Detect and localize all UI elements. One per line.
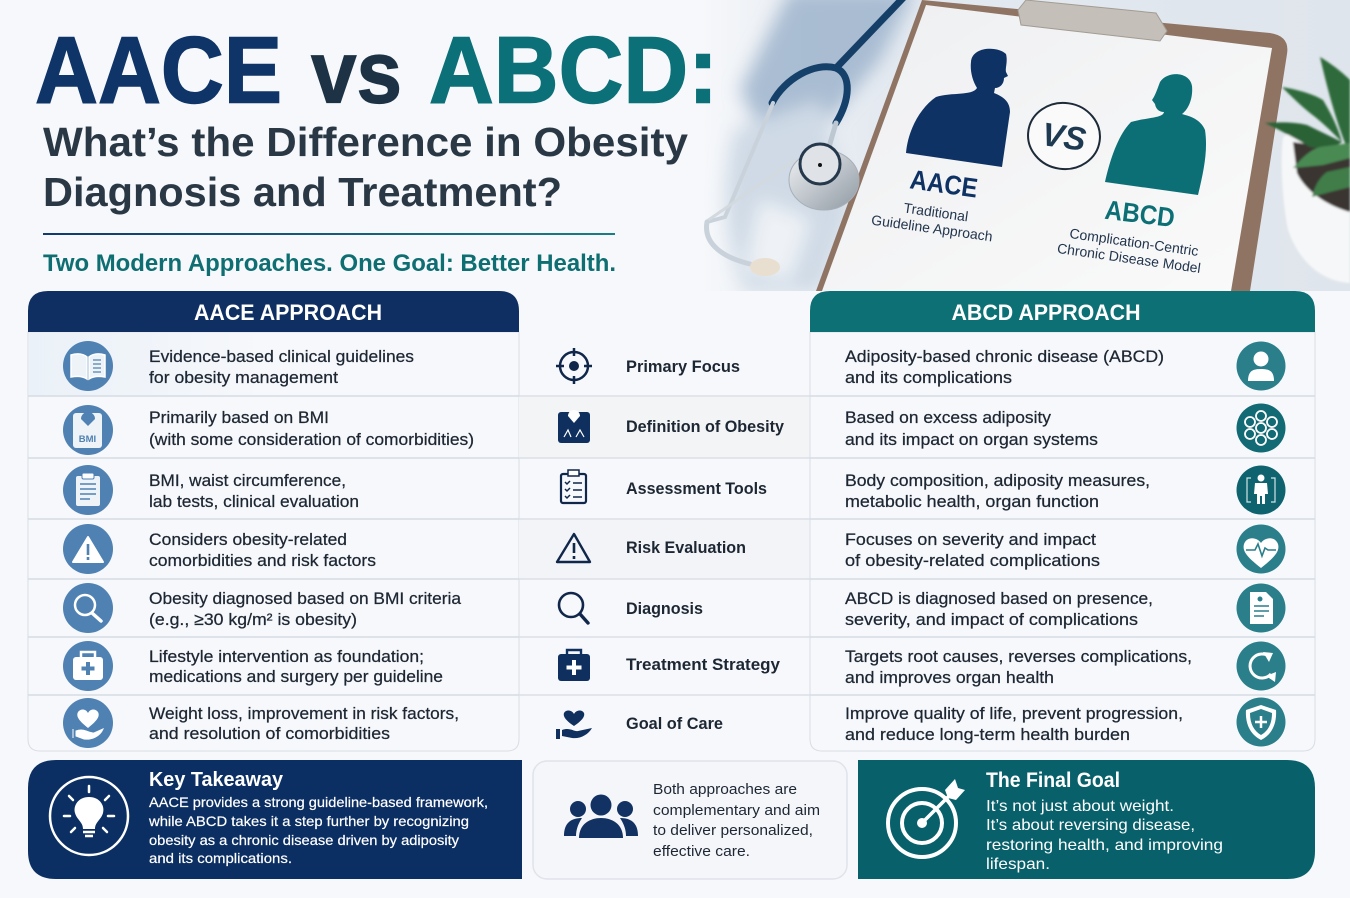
callout: key takeaway: obesity as a chronic disease driven by adiposity — [149, 832, 459, 848]
potted plant — [1265, 57, 1350, 283]
row 7: shield icon and text: Improve quality of life, prevent progression, — [845, 704, 1183, 723]
row 2: cell cluster icon and text: Based on excess adiposity — [845, 408, 1052, 427]
row 5: magnifier icon and text — [63, 583, 462, 633]
subtitle — [43, 119, 688, 215]
stethoscope — [707, 0, 903, 276]
Treatment Strategy: Treatment Strategy — [626, 656, 781, 674]
Assessment Tools: Assessment Tools — [626, 480, 767, 498]
title: AACE — [35, 18, 282, 124]
callout: key takeaway: while ABCD takes it a step further by recognizing — [148, 813, 469, 829]
Risk Evaluation — [557, 534, 746, 562]
hero photo: clipboard, stethoscope and plant — [700, 0, 1350, 291]
Goal of Care — [556, 710, 723, 739]
row 1: person icon and text — [845, 342, 1286, 390]
row 3: clipboard icon and text: lab tests, clinical evaluation — [149, 492, 359, 511]
callout: key takeaway: Key Takeaway — [149, 769, 284, 791]
row 5: magnifier icon and text: (e.g., ≥30 kg/m² is obesity) — [149, 610, 357, 629]
row 5: document icon and text — [845, 584, 1286, 632]
row 1: person icon and text: and its complications — [845, 368, 1012, 387]
row 2: BMI scale icon and text — [63, 405, 474, 455]
row 6: first aid icon and text: Lifestyle intervention as foundation; — [149, 647, 424, 666]
row 3: body scan icon and text — [845, 466, 1286, 514]
row 1: person icon and text: Adiposity-based chronic disease (ABCD) — [845, 347, 1164, 366]
ABCD silhouette — [1105, 74, 1206, 195]
callout: complementary approaches: complementary and aim — [653, 802, 820, 819]
callout: the final goal: It’s about reversing disease, — [986, 817, 1195, 834]
row 6: renewal arrows icon and text: and improves organ health — [845, 668, 1054, 687]
row 6: first aid icon and text — [63, 641, 443, 691]
hero photo: clipboard, stethoscope and plant: Guideline Approach — [870, 212, 994, 244]
row 2: BMI scale icon and text: (with some consideration of comorbidities) — [149, 430, 474, 449]
hero photo: clipboard, stethoscope and plant: Complication-Centric — [1069, 225, 1199, 259]
callout: the final goal: It’s not just about weight. — [986, 798, 1174, 815]
title: ABCD: — [429, 18, 718, 124]
row 5: document icon and text: ABCD is diagnosed based on presence, — [845, 589, 1153, 608]
row 1: book icon and text: for obesity management — [149, 368, 338, 387]
panel: comparison criteria — [519, 348, 810, 739]
row 7: heart in hand icon and text: and resolution of comorbidities — [149, 724, 390, 743]
hero photo: clipboard, stethoscope and plant: ABCD — [1103, 195, 1176, 233]
Diagnosis — [559, 593, 703, 623]
callout: complementary approaches: to deliver personalized, — [653, 822, 813, 839]
row 3: clipboard icon and text — [63, 465, 359, 515]
row 5: document icon and text: severity, and impact of complications — [845, 610, 1138, 629]
hero photo: clipboard, stethoscope and plant: Traditional — [903, 200, 969, 224]
callout: key takeaway: and its complications. — [149, 850, 292, 866]
row 4: warning icon and text: Considers obesity-related — [149, 530, 347, 549]
AACE silhouette — [906, 49, 1010, 167]
Treatment Strategy — [558, 650, 781, 681]
Primary Focus: Primary Focus — [626, 358, 740, 376]
callout: complementary approaches: effective care. — [653, 843, 750, 860]
row 4: warning icon and text: comorbidities and risk factors — [149, 551, 376, 570]
icon: light bulb — [50, 777, 128, 855]
row 6: renewal arrows icon and text: Targets root causes, reverses complications, — [845, 647, 1192, 666]
Goal of Care: Goal of Care — [626, 715, 723, 733]
row 3: body scan icon and text: Body composition, adiposity measures, — [845, 471, 1150, 490]
row 3: body scan icon and text: metabolic health, organ function — [845, 492, 1099, 511]
callout: key takeaway — [28, 760, 522, 879]
row 4: heart pulse icon and text: Focuses on severity and impact — [845, 530, 1096, 549]
title — [35, 18, 718, 124]
panel: AACE approach — [28, 291, 519, 751]
icon: target with arrow — [888, 779, 965, 857]
callout: the final goal: restoring health, and improving — [986, 837, 1223, 854]
AACE header: AACE APPROACH — [194, 300, 382, 325]
row 6: first aid icon and text: medications and surgery per guideline — [149, 667, 443, 686]
VS badge — [1027, 102, 1101, 170]
icon: people — [564, 794, 638, 838]
callout: the final goal: The Final Goal — [986, 769, 1120, 792]
callout: the final goal: lifespan. — [986, 856, 1050, 873]
row 7: heart in hand icon and text: Weight loss, improvement in risk factors, — [149, 704, 459, 723]
VS badge: VS — [1040, 115, 1088, 158]
row 7: shield icon and text — [845, 698, 1286, 746]
callout: the final goal — [858, 760, 1315, 879]
row 1: book icon and text: Evidence-based clinical guidelines — [149, 347, 414, 366]
row 2: BMI scale icon and text: BMI — [79, 434, 96, 445]
row 7: heart in hand icon and text — [63, 698, 459, 748]
row 1: book icon and text — [63, 341, 414, 391]
Definition of Obesity: Definition of Obesity — [626, 418, 785, 436]
clipboard board — [816, 0, 1287, 291]
row 4: warning icon and text — [63, 524, 376, 574]
ABCD header — [810, 291, 1315, 332]
callout: complementary approaches: Both approaches are — [653, 781, 797, 798]
row 2: BMI scale icon and text: Primarily based on BMI — [149, 408, 329, 427]
row 6: renewal arrows icon and text — [845, 642, 1286, 690]
clipboard clip — [1018, 0, 1167, 41]
Definition of Obesity — [558, 410, 785, 443]
callout: complementary approaches — [533, 761, 847, 879]
row 4: heart pulse icon and text: of obesity-related complications — [845, 551, 1100, 570]
AACE panel body — [28, 332, 519, 751]
Primary Focus — [556, 348, 740, 384]
row 5: magnifier icon and text: Obesity diagnosed based on BMI criteria — [149, 589, 462, 608]
panel: ABCD approach — [810, 291, 1315, 751]
clipboard labels: AACE — [908, 164, 980, 204]
Assessment Tools — [561, 470, 767, 503]
Diagnosis: Diagnosis — [626, 600, 703, 618]
row 4: heart pulse icon and text — [845, 524, 1286, 574]
row 3: clipboard icon and text: BMI, waist circumference, — [149, 471, 346, 490]
row 2: cell cluster icon and text — [845, 404, 1286, 452]
ABCD header: ABCD APPROACH — [952, 300, 1140, 325]
row 7: shield icon and text: and reduce long-term health burden — [845, 725, 1130, 744]
subtitle: Diagnosis and Treatment? — [43, 169, 562, 215]
hero photo: clipboard, stethoscope and plant: Chronic Disease Model — [1056, 240, 1202, 276]
row 2: cell cluster icon and text: and its impact on organ systems — [845, 430, 1098, 449]
Risk Evaluation: Risk Evaluation — [626, 539, 746, 557]
title: vs — [311, 22, 402, 122]
callout: key takeaway: AACE provides a strong guideline-based framework, — [149, 794, 488, 810]
clipboard paper — [822, 5, 1272, 291]
subtitle: What’s the Difference in Obesity — [43, 119, 688, 165]
tagline: Two Modern Approaches. One Goal: Better Health. — [43, 250, 616, 277]
AACE header — [28, 291, 519, 332]
ABCD panel body — [810, 332, 1315, 751]
